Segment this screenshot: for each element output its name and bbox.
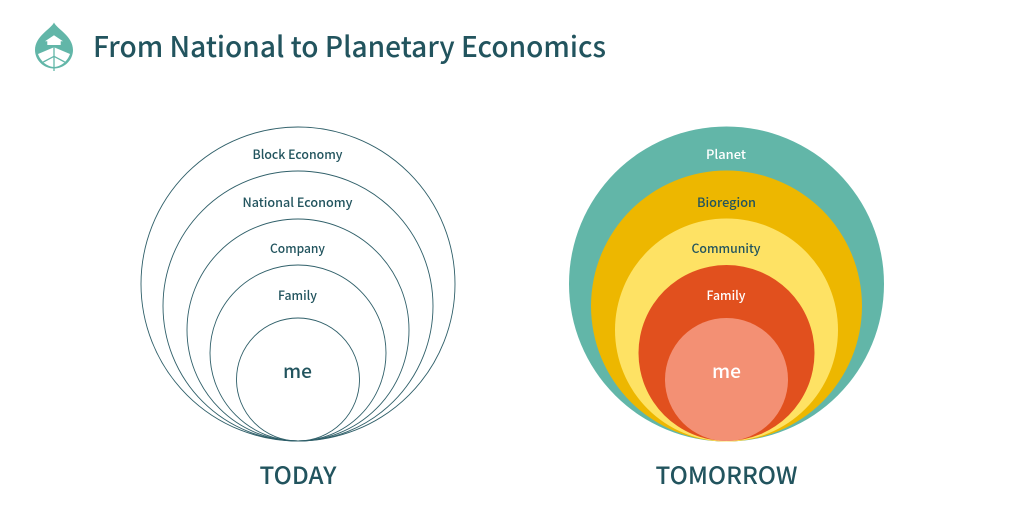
label: bioregion: Bioregion [697,192,756,211]
label: family: Family [706,285,746,304]
circle: block economy [141,127,455,441]
icon: logo drop with house and boat [35,22,73,71]
diagram: today nested circles [141,127,455,441]
label: me: me [712,357,741,384]
circle: me [236,318,360,441]
label: community: Community [692,238,761,257]
title: From National to Planetary Economics [93,25,606,66]
label: me: me [283,357,312,384]
heading: tomorrow: TOMORROW [656,456,798,491]
circle: bioregion [591,170,862,442]
circle: company [187,219,409,441]
label: block economy: Block Economy [252,144,343,163]
diagram: tomorrow nested circles [569,126,884,442]
circle: family [638,265,814,441]
circle: me [665,318,788,441]
label: national economy: National Economy [242,192,353,211]
circle: planet [569,126,884,442]
circle: community [615,218,838,442]
label: family: Family [278,285,317,304]
circle: national economy [163,171,433,441]
heading: today: TODAY [260,456,337,491]
circle: family [210,265,386,441]
label: company: Company [270,238,325,257]
label: planet: Planet [706,144,746,163]
